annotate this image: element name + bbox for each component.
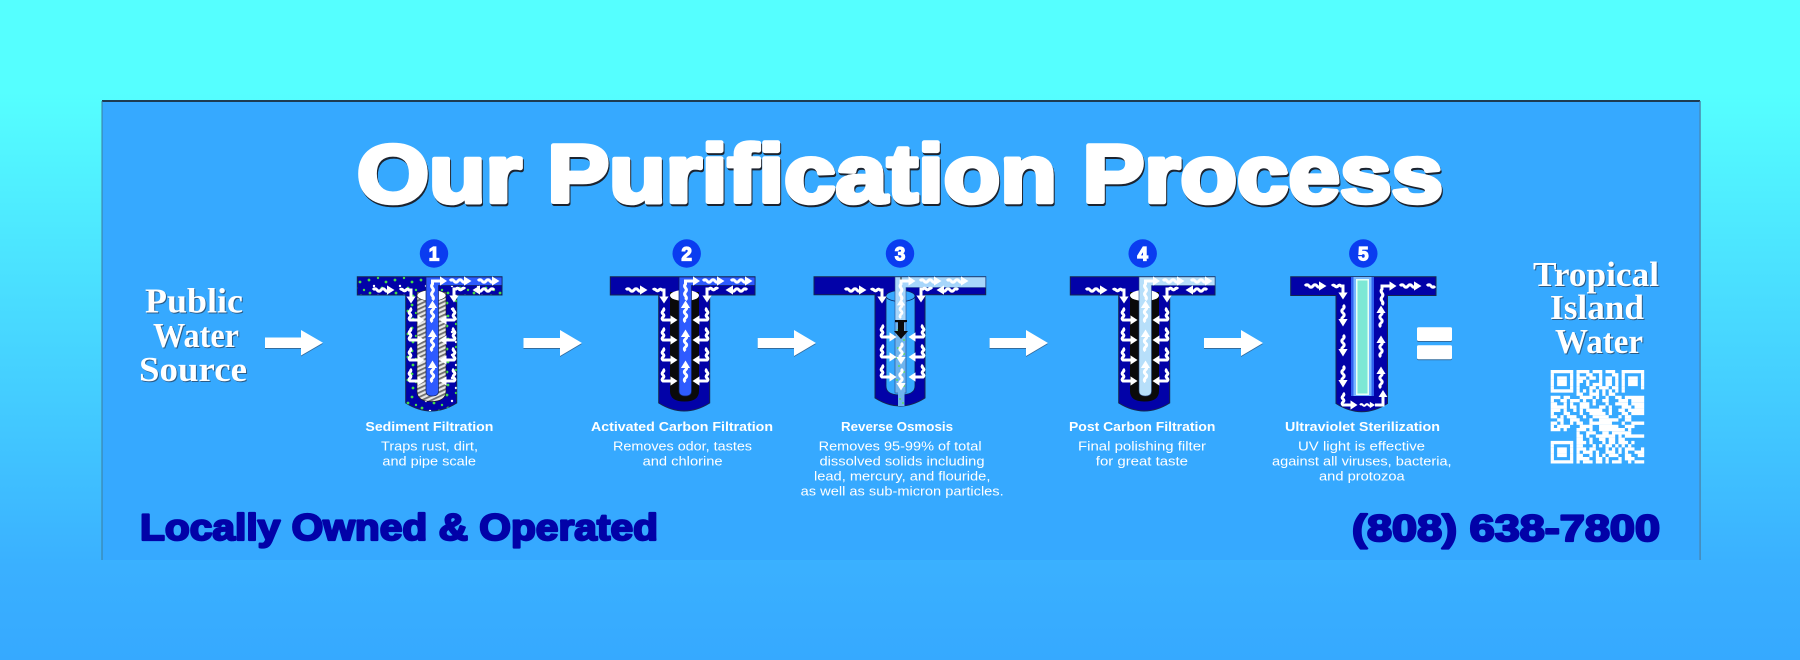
text: tropical island water <box>1533 255 1659 361</box>
caption: activated carbon filtration: Activated Carbon Filtration <box>591 419 773 434</box>
badge: step 3: 3 <box>895 244 905 266</box>
diagram: activated carbon filter <box>610 276 755 411</box>
caption: post carbon filtration: Post Carbon Filtration <box>1069 419 1215 434</box>
caption: sediment filtration: and pipe scale <box>382 454 476 469</box>
text: public water source: Source <box>139 350 247 389</box>
caption: activated carbon filtration <box>591 419 773 469</box>
caption: reverse osmosis: Removes 95-99% of total <box>819 439 982 454</box>
text: tropical island water: Island <box>1550 288 1645 327</box>
diagram: sediment filter <box>357 276 502 411</box>
badge: step 3 <box>886 239 914 268</box>
badge: step 2 <box>672 239 701 268</box>
text: public water source: Public <box>145 282 243 320</box>
badge: step 4 <box>1128 239 1157 268</box>
badge: step 5 <box>1349 239 1378 268</box>
equals sign <box>1417 327 1452 359</box>
qr code <box>1551 372 1644 462</box>
caption: reverse osmosis: lead, mercury, and flouride, <box>814 468 990 484</box>
caption: reverse osmosis: as well as sub-micron particles. <box>801 484 1004 498</box>
caption: sediment filtration <box>365 419 493 469</box>
caption: reverse osmosis: dissolved solids including <box>820 454 984 469</box>
badge: step 5: 5 <box>1358 244 1369 266</box>
caption: sediment filtration: Sediment Filtration <box>365 419 493 434</box>
diagram: post carbon filter <box>1070 276 1215 411</box>
caption: reverse osmosis <box>801 419 1004 498</box>
tagline: Locally Owned & Operated <box>140 507 658 548</box>
title: Our Purification Process <box>357 129 1443 220</box>
caption: post carbon filtration: Final polishing filter <box>1078 439 1207 454</box>
caption: ultraviolet sterilization: and protozoa <box>1319 468 1406 484</box>
diagram: reverse osmosis membrane <box>814 276 986 406</box>
caption: reverse osmosis: Reverse Osmosis <box>841 419 953 434</box>
caption: ultraviolet sterilization: against all viruses, bacteria, <box>1272 454 1452 469</box>
badge: step 2: 2 <box>681 244 692 266</box>
phone number: (808) 638-7800 <box>1352 508 1660 549</box>
caption: activated carbon filtration: and chlorine <box>643 454 723 469</box>
arrow: step 4 to step 5 <box>1204 330 1263 356</box>
caption: activated carbon filtration: Removes odor, tastes <box>613 439 753 454</box>
text: public water source <box>139 282 247 389</box>
badge: step 4: 4 <box>1137 244 1148 266</box>
text: tropical island water: Tropical <box>1533 255 1659 294</box>
caption: post carbon filtration: for great taste <box>1096 454 1188 469</box>
caption: ultraviolet sterilization: UV light is effective <box>1298 439 1425 454</box>
diagram: ultraviolet lamp <box>1291 277 1436 412</box>
arrow: step 1 to step 2 <box>524 330 582 356</box>
arrow: step 3 to step 4 <box>990 330 1048 356</box>
text: public water source: Water <box>153 316 239 355</box>
badge: step 1 <box>420 239 448 268</box>
arrow: source to step 1 <box>265 330 323 356</box>
caption: post carbon filtration <box>1069 419 1215 469</box>
text: tropical island water: Water <box>1555 322 1643 361</box>
caption: ultraviolet sterilization <box>1272 419 1452 484</box>
arrow: step 2 to step 3 <box>758 330 816 356</box>
caption: ultraviolet sterilization: Ultraviolet Sterilization <box>1285 419 1440 434</box>
badge: step 1: 1 <box>429 244 440 266</box>
panel: main blue board <box>102 100 1701 560</box>
caption: sediment filtration: Traps rust, dirt, <box>381 439 478 454</box>
